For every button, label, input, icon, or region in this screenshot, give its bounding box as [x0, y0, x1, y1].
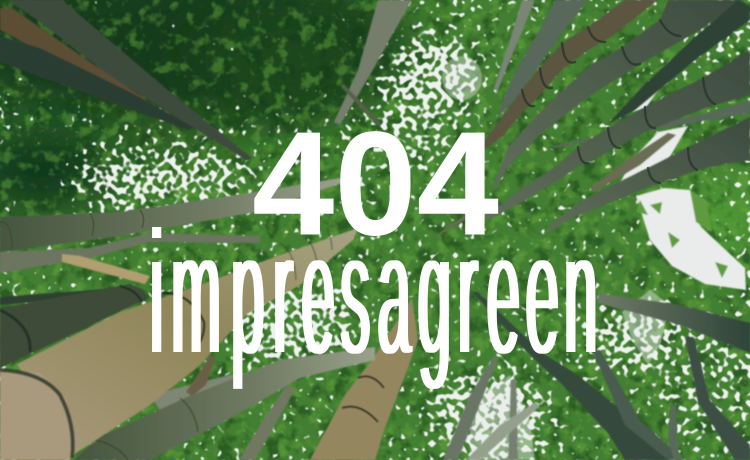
bamboo stalks: lower left grey: [73, 347, 375, 460]
bamboo stalks: top centre: [334, 0, 412, 125]
tan bamboo: lower centre: [310, 298, 418, 460]
bamboo stalks: lower right dark: [472, 292, 750, 460]
bamboo stalks: upper left: [0, 0, 252, 160]
wordmark: impresagreen: impresagreen: [150, 194, 597, 393]
bamboo stalks: dark left: [0, 284, 148, 368]
large tan bamboo: [0, 228, 358, 460]
bamboo node rings: left: [0, 210, 144, 250]
open sky patches: [442, 56, 746, 460]
title: 404: 404: [252, 102, 499, 266]
bamboo nodes: upper right: [522, 20, 715, 183]
bamboo stalks: upper right: [432, 0, 750, 238]
bamboo stalks: left horizontal: [0, 178, 345, 305]
thin grey bamboo poles: lower centre: [239, 356, 540, 460]
